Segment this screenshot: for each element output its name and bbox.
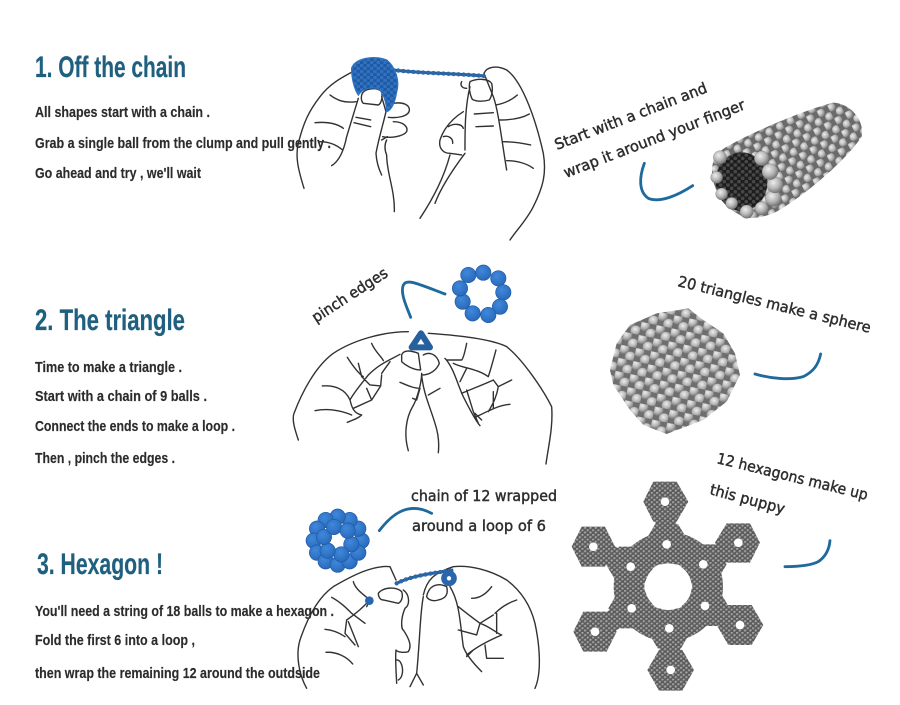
heading: off the chain: 1. Off the chain xyxy=(35,51,186,84)
annotation: chain of 12: around a loop of 6 xyxy=(412,517,546,535)
text block: step 2: Connect the ends to make a loop . xyxy=(35,418,235,435)
text block: step 3: You'll need a string of 18 balls to make a hexagon . xyxy=(35,603,334,620)
arrow: curve to star xyxy=(785,541,830,567)
icon: blue hexagon of balls xyxy=(306,509,369,572)
illustration: hands pulling chain from clump xyxy=(297,58,545,240)
annotation: start with a chain: wrap it around your finger xyxy=(561,95,748,182)
text block: step 3: then wrap the remaining 12 around the outdside xyxy=(35,665,320,682)
arrow: chain to blue hexagon xyxy=(379,508,432,531)
annotation: 12 hexagons: 12 hexagons make up xyxy=(715,449,870,504)
text block: step 2: Then , pinch the edges . xyxy=(35,450,175,467)
icon: ring of nine blue balls xyxy=(452,265,511,323)
annotation: 12 hexagons: this puppy xyxy=(708,480,787,518)
text block: step 2: Time to make a triangle . xyxy=(35,359,182,376)
annotation: 20 triangles: 20 triangles make a sphere xyxy=(676,272,873,337)
text block: step 1: All shapes start with a chain . xyxy=(35,104,210,121)
text block: step 1: Go ahead and try , we'll wait xyxy=(35,165,201,182)
annotation: start with a chain: Start with a chain and xyxy=(552,79,710,154)
chain xyxy=(393,70,484,76)
icon: blue triangle xyxy=(412,333,430,347)
text block: step 1: Grab a single ball from the clump and pull gently . xyxy=(35,135,331,152)
panel: step 3 instructions xyxy=(35,548,334,682)
panel: step 2 instructions xyxy=(35,304,235,467)
annotation: chain of 12: chain of 12 wrapped xyxy=(411,487,557,505)
heading: the triangle: 2. The triangle xyxy=(35,304,185,337)
arrow: curve to tube xyxy=(641,163,693,200)
text block: step 3: Fold the first 6 into a loop , xyxy=(35,632,195,649)
text block: step 1 xyxy=(35,104,331,182)
illustration: star of twelve hexagons xyxy=(572,482,763,691)
text block: step 3 xyxy=(35,603,334,682)
clump of blue balls xyxy=(352,58,398,112)
arrow: pinch edges to triangle xyxy=(402,282,445,317)
annotation: pinch edges: pinch edges xyxy=(308,264,391,326)
illustration: sphere of steel balls xyxy=(610,308,740,434)
heading: hexagon: 3. Hexagon ! xyxy=(37,548,163,581)
illustration: tube of steel balls xyxy=(711,103,862,218)
illustration: hands pinching triangle xyxy=(293,332,552,464)
panel: step 1 instructions xyxy=(35,51,331,182)
illustration: hands wrapping hexagon xyxy=(298,566,539,688)
annotation: chain of 12 xyxy=(411,487,557,535)
arrow: curve to sphere xyxy=(755,354,821,379)
text block: step 2 xyxy=(35,359,235,467)
chain with loop xyxy=(365,570,454,605)
text block: step 2: Start with a chain of 9 balls . xyxy=(35,388,207,405)
